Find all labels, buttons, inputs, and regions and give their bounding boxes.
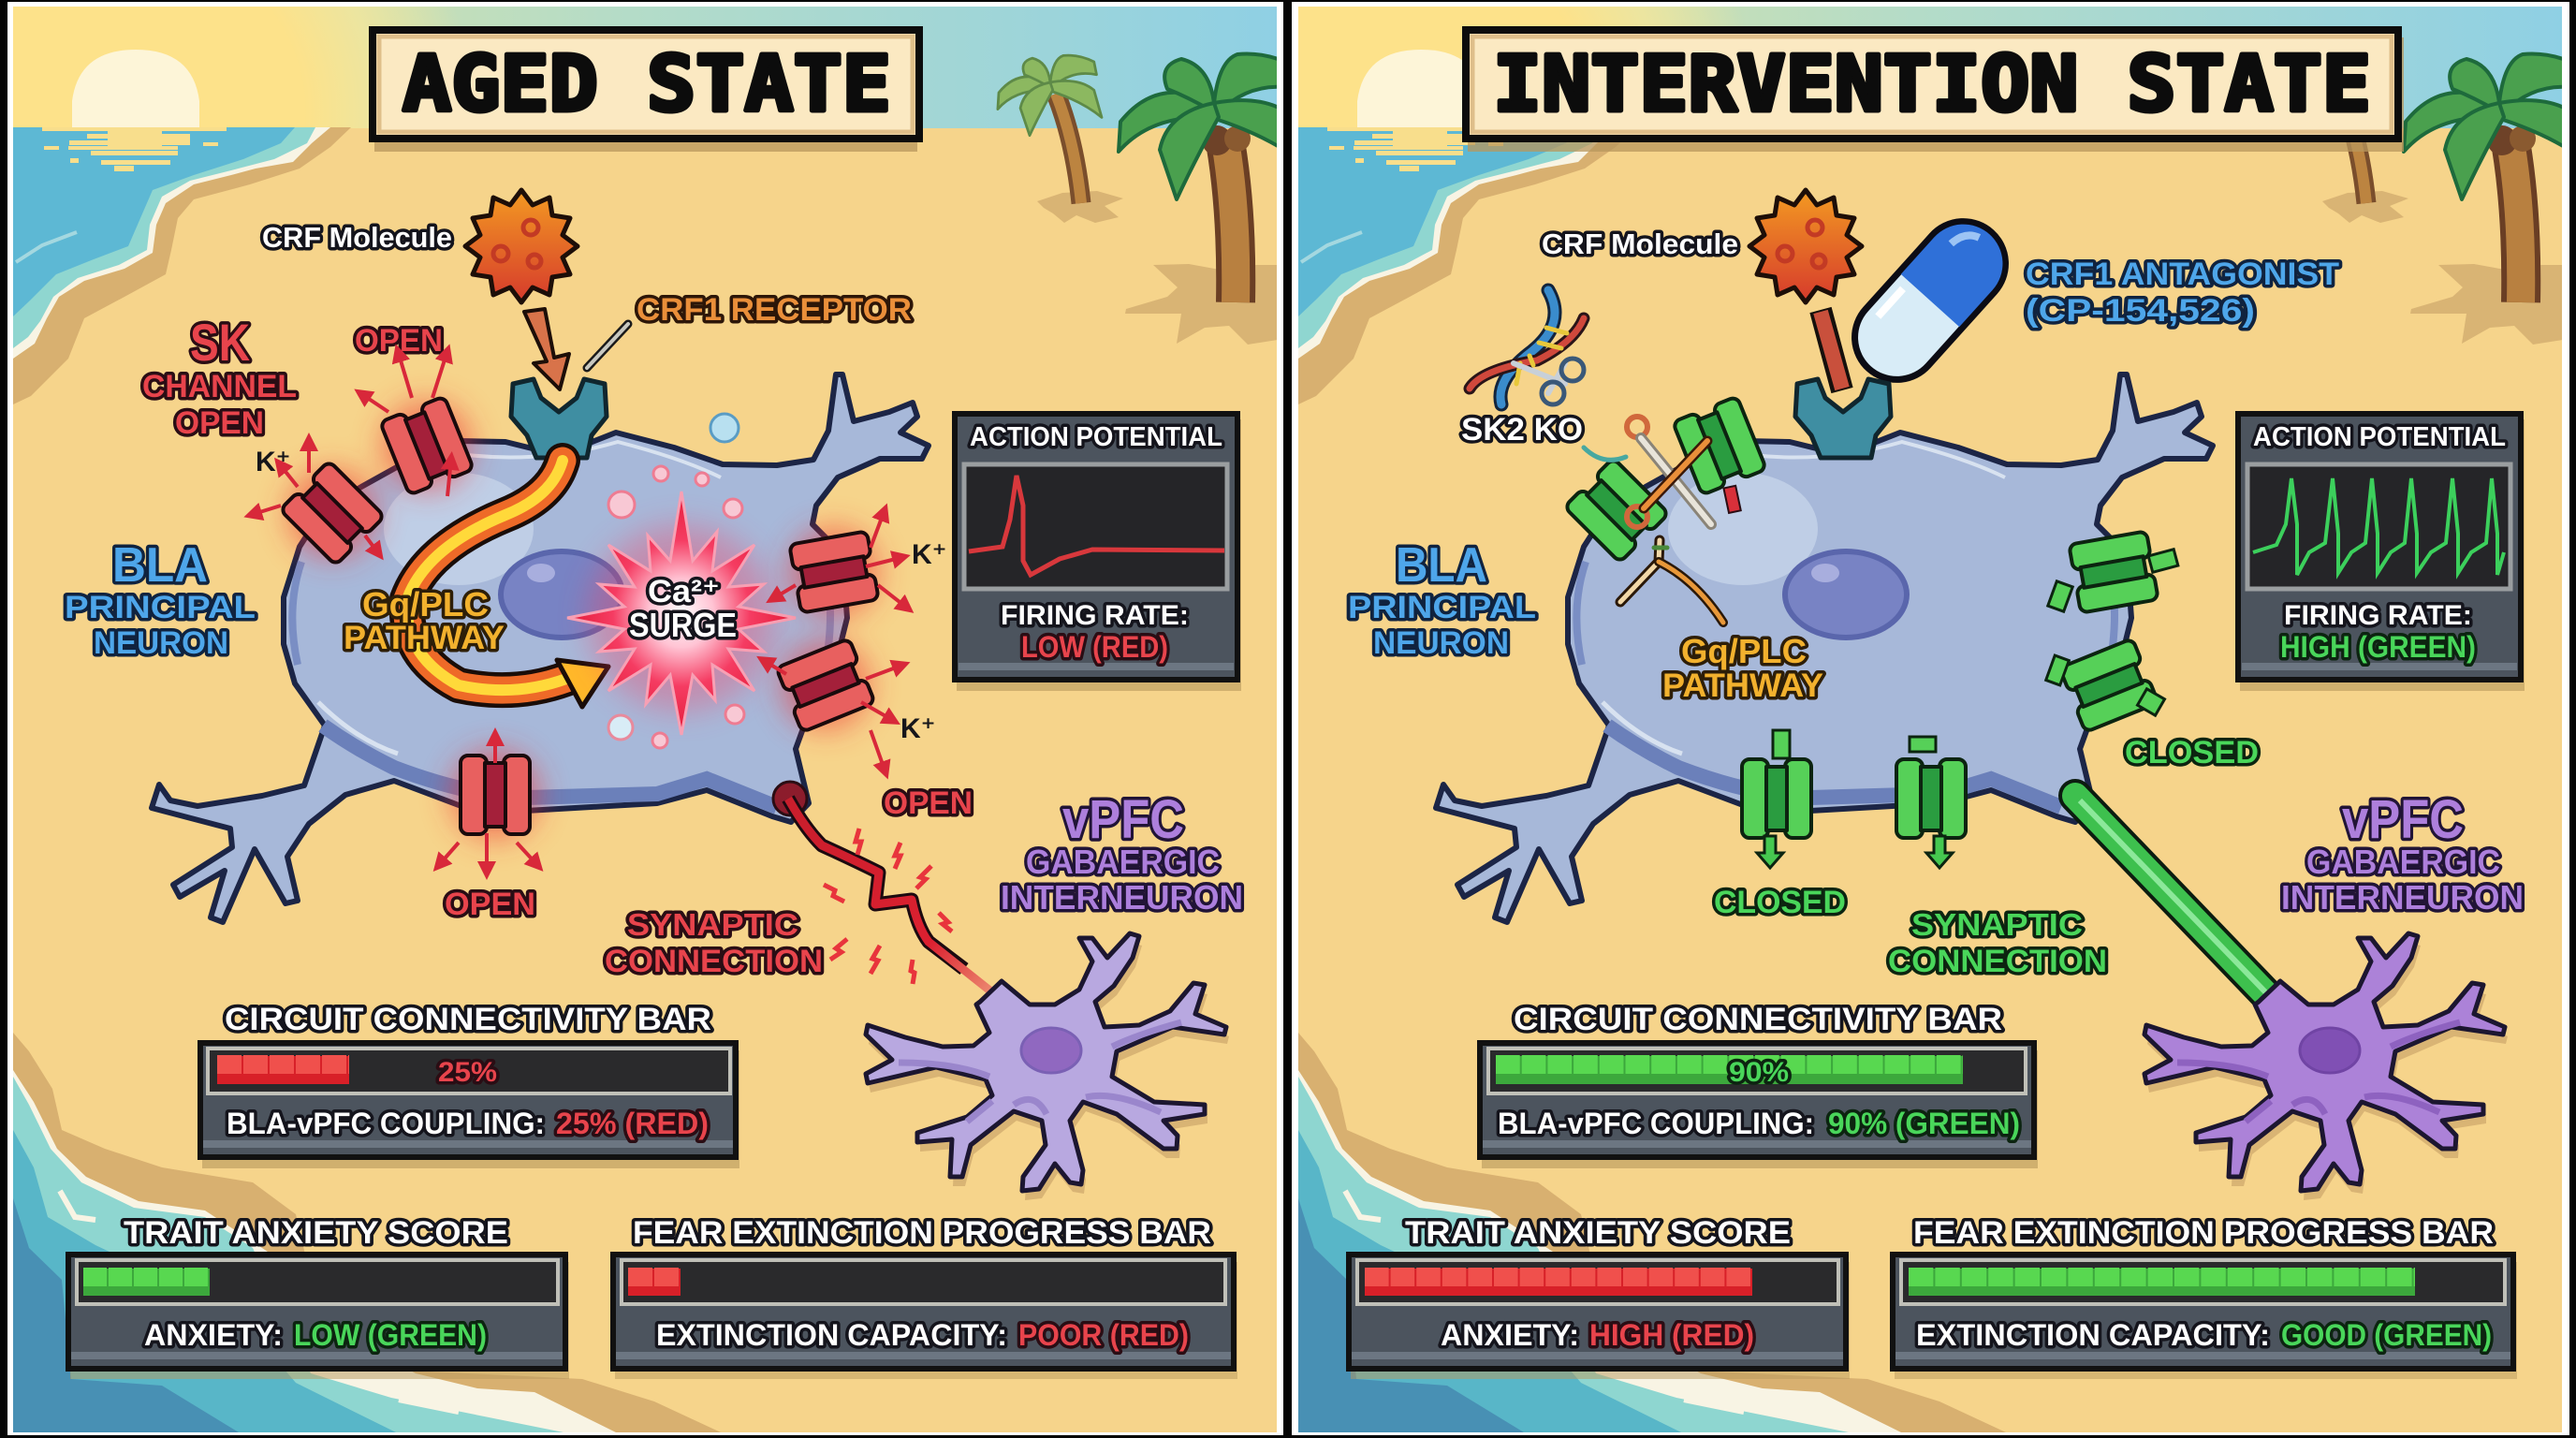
- arrow: CRF binding to receptor: [524, 309, 569, 389]
- panel: action potential monitor: HIGH (GREEN): [2280, 630, 2476, 664]
- label: Gq/PLC pathway: PATHWAY: [344, 620, 505, 656]
- label: BLA principal neuron: NEURON: [94, 625, 228, 661]
- neuron: BLA principal neuron: [1436, 374, 2213, 922]
- title: aged state: [373, 30, 919, 152]
- label: closed bottom: CLOSED: [1714, 885, 1846, 920]
- label: BLA principal neuron: [1348, 538, 1536, 661]
- panel: fear extinction progress bar: POOR (RED): [1018, 1318, 1189, 1352]
- panel: circuit connectivity bar: CIRCUIT CONNECTIVITY BAR: [225, 1002, 711, 1037]
- label: K+ ions: K⁺: [912, 539, 947, 570]
- panel: circuit connectivity bar: 25%: [438, 1057, 497, 1088]
- label: BLA principal neuron: BLA: [1396, 538, 1487, 593]
- label: vPFC GABAergic interneuron: [1001, 789, 1243, 917]
- label: closed right: CLOSED: [2125, 735, 2259, 770]
- panel: fear extinction progress bar: FEAR EXTINCTION PROGRESS BAR: [633, 1215, 1211, 1251]
- SK channels open with glow: [251, 351, 908, 873]
- panel: circuit connectivity bar: [200, 1002, 739, 1168]
- label: CRF molecule: CRF Molecule: [1542, 227, 1738, 260]
- label: CRF1 receptor: CRF1 RECEPTOR: [637, 292, 912, 328]
- label: BLA principal neuron: NEURON: [1373, 625, 1509, 661]
- panel: fear extinction progress bar: GOOD (GREEN): [2281, 1318, 2492, 1352]
- label: SK channel open: SK: [190, 313, 250, 372]
- label: Ca2+ surge: Ca²⁺: [648, 574, 720, 609]
- label: Gq/PLC pathway: [1662, 632, 1823, 704]
- blocked CRF arrow stub: [1821, 310, 1842, 390]
- icon: DNA with scissors: [1470, 290, 1584, 404]
- label: SK channel open: [142, 313, 297, 441]
- calcium surge burst: [567, 492, 796, 735]
- panel: trait anxiety score: TRAIT ANXIETY SCORE: [124, 1215, 508, 1251]
- panel: intervention state: [1348, 30, 2525, 1379]
- chart: high firing trace: [2253, 478, 2504, 575]
- panel: action potential monitor: FIRING RATE:: [2284, 600, 2472, 631]
- icon: CRF molecule: [1749, 190, 1862, 302]
- label: vPFC GABAergic interneuron: vPFC: [1062, 789, 1184, 850]
- panel: trait anxiety score: ANXIETY:: [1441, 1318, 1579, 1352]
- panel: circuit connectivity bar: 25% (RED): [556, 1107, 709, 1140]
- panel: trait anxiety score: HIGH (RED): [1589, 1318, 1754, 1352]
- label: Ca2+ surge: [629, 574, 737, 644]
- label: open bottom: OPEN: [445, 887, 535, 922]
- label: BLA principal neuron: [65, 538, 256, 661]
- label: Gq/PLC pathway: [344, 585, 505, 656]
- label: synaptic connection: CONNECTION: [605, 944, 823, 979]
- leader line to receptor: [587, 324, 628, 368]
- panel: trait anxiety score: TRAIT ANXIETY SCORE: [1405, 1215, 1791, 1251]
- panel: fear extinction progress bar: EXTINCTION CAPACITY:: [1916, 1318, 2270, 1352]
- beach background right: [1298, 7, 2576, 1432]
- panel: action potential monitor: ACTION POTENTIAL: [2253, 422, 2506, 452]
- chart: low firing trace: [969, 476, 1224, 575]
- panel: fear extinction progress bar: [613, 1215, 1237, 1379]
- beach background: sky, sun, sea and palms: [13, 7, 1308, 1432]
- label: synaptic connection: SYNAPTIC: [1911, 907, 2083, 942]
- panel frame right: [1292, 2, 2569, 1435]
- axon: weak synaptic connection: [773, 782, 992, 992]
- icon: scissors cutting SK channel: [1584, 417, 1741, 527]
- panel: aged state: [13, 7, 1308, 1432]
- panel: trait anxiety score: LOW (GREEN): [294, 1318, 487, 1352]
- label: open top: OPEN: [355, 323, 443, 359]
- label: CRF1 antagonist: [2026, 257, 2339, 329]
- panel frame left: [7, 2, 1283, 1435]
- label: CRF molecule: CRF Molecule: [262, 221, 452, 254]
- label: BLA principal neuron: BLA: [112, 538, 208, 593]
- blocked CRF arrow inner: [1821, 312, 1842, 389]
- label: K+ ions: [256, 447, 947, 744]
- label: vPFC GABAergic interneuron: GABAERGIC: [1026, 843, 1220, 881]
- panel: circuit connectivity bar: 90% (GREEN): [1828, 1107, 2020, 1140]
- icon: CRF molecule: [465, 190, 578, 302]
- panel: circuit connectivity bar: [1480, 1002, 2038, 1168]
- green closed channels: [1564, 396, 2178, 868]
- label: Gq/PLC pathway: PATHWAY: [1662, 668, 1823, 704]
- label: vPFC GABAergic interneuron: INTERNEURON: [2281, 878, 2524, 917]
- label: synaptic connection: SYNAPTIC: [627, 907, 798, 942]
- label: vPFC GABAergic interneuron: INTERNEURON: [1001, 878, 1243, 917]
- neuron: vPFC interneuron: [2144, 933, 2508, 1200]
- panel: action potential monitor: [955, 414, 1241, 691]
- potassium efflux arrows: [251, 351, 908, 873]
- label: synaptic connection: CONNECTION: [1888, 944, 2107, 979]
- label: Gq/PLC pathway: Gq/PLC: [362, 585, 489, 624]
- neuron: vPFC interneuron: [866, 933, 1229, 1200]
- detached green pieces: [1773, 550, 2178, 758]
- panel: trait anxiety score: ANXIETY:: [144, 1318, 283, 1352]
- label: BLA principal neuron: PRINCIPAL: [65, 590, 256, 625]
- label: SK2 KO: SK2 KO: [1461, 412, 1583, 448]
- label: K+ ions: K⁺: [256, 447, 290, 477]
- panel: action potential monitor: FIRING RATE:: [1001, 600, 1189, 631]
- label: BLA principal neuron: PRINCIPAL: [1348, 590, 1536, 625]
- label: Gq/PLC pathway: Gq/PLC: [1681, 632, 1807, 670]
- panel: circuit connectivity bar: 90%: [1729, 1057, 1789, 1088]
- icon: antagonist pill: [1837, 204, 2023, 397]
- arrows down: [1757, 836, 1953, 868]
- panel: trait anxiety score: [68, 1215, 569, 1379]
- label: SK channel open: CHANNEL: [142, 369, 297, 404]
- panel: action potential monitor: ACTION POTENTIAL: [970, 422, 1222, 452]
- panel: fear extinction progress bar: FEAR EXTINCTION PROGRESS BAR: [1913, 1215, 2494, 1251]
- panel: fear extinction progress bar: EXTINCTION CAPACITY:: [656, 1318, 1007, 1352]
- title: aged state: AGED STATE: [402, 40, 891, 129]
- title: intervention state: INTERVENTION STATE: [1493, 40, 2371, 129]
- label: CRF1 antagonist: (CP-154,526): [2026, 293, 2255, 329]
- label: synaptic connection: [605, 907, 823, 979]
- neuron: BLA principal neuron: [152, 374, 929, 922]
- panel: circuit connectivity bar: CIRCUIT CONNECTIVITY BAR: [1514, 1002, 2002, 1037]
- panel: action potential monitor: LOW (RED): [1021, 630, 1168, 664]
- label: vPFC GABAergic interneuron: [2281, 789, 2524, 917]
- calcium bubbles: [608, 414, 744, 748]
- panel: fear extinction progress bar: [1893, 1215, 2517, 1379]
- Gq/PLC pathway arrow: [407, 461, 608, 707]
- panel: trait anxiety score: [1349, 1215, 1850, 1379]
- label: Ca2+ surge: SURGE: [629, 606, 737, 644]
- label: vPFC GABAergic interneuron: vPFC: [2342, 789, 2464, 850]
- label: K+ ions: K⁺: [900, 713, 936, 744]
- axon: strong synaptic connection: [2075, 796, 2284, 1013]
- cut Gq/PLC pathway: [1620, 540, 1723, 623]
- label: synaptic connection: [1888, 907, 2107, 979]
- label: SK channel open: OPEN: [175, 405, 264, 441]
- label: open right: OPEN: [884, 785, 973, 821]
- label: CRF1 antagonist: CRF1 ANTAGONIST: [2026, 257, 2339, 292]
- label: vPFC GABAergic interneuron: GABAERGIC: [2306, 843, 2500, 881]
- panel: circuit connectivity bar: BLA-vPFC COUPLING:: [227, 1107, 545, 1140]
- panel: circuit connectivity bar: BLA-vPFC COUPLING:: [1498, 1107, 1814, 1140]
- sparks: [824, 829, 952, 984]
- panel: action potential monitor: [2238, 414, 2525, 691]
- title: intervention state: [1466, 30, 2404, 152]
